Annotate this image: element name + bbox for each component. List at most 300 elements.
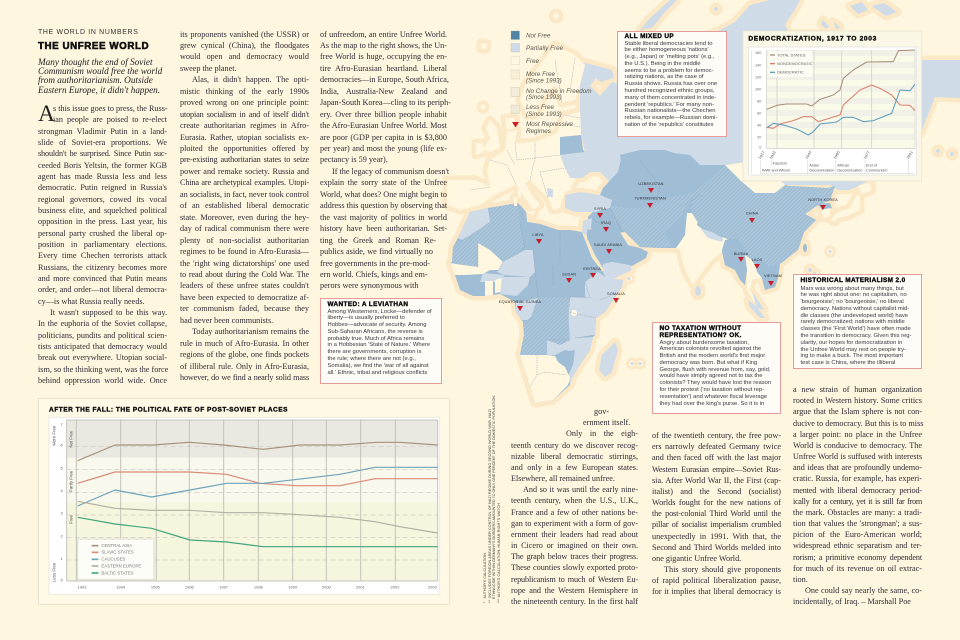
chart legend: EASTERN EUROPE xyxy=(101,563,141,568)
text column 3: pectancy is 59 year). xyxy=(320,155,388,164)
chart y axis: Free xyxy=(69,515,74,524)
chart y axis: 5 xyxy=(61,465,64,470)
chart title: AFTER THE FALL: THE POLITICAL FATE OF POST-SOVIET PLACES xyxy=(49,407,288,414)
text column 2: of an established liberal democratic xyxy=(180,201,309,210)
map legend: Regimes xyxy=(526,128,552,135)
text column 1 xyxy=(38,104,168,385)
sidebar text: for their protest ('no taxation without rep- xyxy=(660,387,764,393)
text column 6: mented with liberal democracy period- xyxy=(793,486,922,495)
vertical footnotes: * AUTHOR'S CALCULATION. xyxy=(483,552,487,603)
sidebar text: all.' Ethnic, tribal and religious conflicts xyxy=(328,370,427,376)
text column 1: agent has made Russia less and less xyxy=(38,172,167,181)
text column 1: position in parliamentary elections. xyxy=(38,240,167,249)
chart x axis: 2003 xyxy=(428,584,438,589)
chart y axis: 1 xyxy=(61,556,64,561)
text column 1: business elite, and squelched political xyxy=(38,206,167,215)
sidebar text xyxy=(660,340,771,407)
text column 3: history have been authoritarian. Set- xyxy=(320,224,447,233)
most repressive regime markers: EQUATORIAL GUINEA xyxy=(499,299,541,304)
chart x axis: Decolonization xyxy=(837,168,862,172)
chart legend: NONDEMOCRATIC xyxy=(777,61,813,66)
sidebar text xyxy=(800,286,912,366)
chart x axis: 1960 xyxy=(833,150,841,160)
chart legend xyxy=(769,51,813,77)
sidebar text: in a Hobbesian 'State of Nature.' Where xyxy=(328,342,430,348)
chart x axis: Decolonization xyxy=(809,168,834,172)
most repressive regime markers: ERITREA xyxy=(583,266,601,271)
sidebar text: Among Westerners, Locke—defender of xyxy=(328,308,432,314)
text column 3: India, Australia-New Zealand and xyxy=(320,87,447,96)
text column 2: create authoritarian regimes in Afro- xyxy=(180,121,309,130)
sidebar text: ing to make a buck. The most important xyxy=(800,353,903,359)
chart x axis xyxy=(758,150,914,172)
chart y axis: 6 xyxy=(61,443,64,448)
text column 4: republicanism to much of Western Eu- xyxy=(511,575,638,584)
most repressive regime markers: SAUDI ARABIA xyxy=(594,242,622,247)
text column 3: per year) and most the young (life ex- xyxy=(320,144,447,153)
sidebar text: probably true. Much of Africa remains xyxy=(328,336,424,342)
text column 5: This story should give proponents xyxy=(664,565,781,574)
chart x axis: 1997 xyxy=(219,584,229,589)
sidebar text: American colonists revolted against the xyxy=(660,346,761,352)
text column 2: sweep the planet. xyxy=(180,64,237,73)
sidebar text: Sub-Saharan Africans, the reverse is xyxy=(328,329,423,335)
text column 6: and ideas that are profoundly undemo- xyxy=(793,463,922,472)
text column 6: tion. xyxy=(793,575,808,584)
most repressive regime markers: VIETNAM xyxy=(764,273,782,278)
sidebar text: he was right about one: no capitalism, no xyxy=(800,292,907,298)
text column 3: perors were synonymous with xyxy=(320,281,418,290)
chart y axis: Not Free xyxy=(69,430,74,448)
chart x axis: Fascism xyxy=(773,162,787,166)
chart x axis: 2001 xyxy=(356,584,366,589)
chart y axis: 0 xyxy=(759,146,761,150)
text column 2: pre-existing authoritarian states to seize xyxy=(180,155,309,164)
standfirst xyxy=(38,56,162,95)
chart x axis: Asian xyxy=(809,163,819,167)
text column 3: Japan-South Korea—cling to its periph- xyxy=(320,98,451,107)
text column 5: pillar of socialist imperialism crumbled xyxy=(652,520,781,529)
chart lines xyxy=(78,442,438,547)
text column 1: It wasn't supposed to be this way. xyxy=(50,308,167,317)
text column 2: have been expected to democratize af- xyxy=(180,293,309,302)
sidebar: historical materialism xyxy=(793,274,922,369)
chart x axis: 1999 xyxy=(288,584,298,589)
map legend: Partially Free xyxy=(526,45,564,52)
text column 5 xyxy=(652,431,781,596)
text column 5: and then faced off with the last major xyxy=(652,453,781,462)
sidebar text: dle classes (the undeveloped world) have xyxy=(800,313,908,319)
text column 4: nizable liberal democratic stirrings, xyxy=(511,452,638,461)
text column 3: are poor (GDP per capita in is $3,800 xyxy=(320,133,447,142)
text column 6: a new strain of human organization xyxy=(793,385,922,394)
chart x axis xyxy=(78,584,438,589)
most repressive regime markers xyxy=(499,181,838,311)
chart title: DEMOCRATIZATION, 1917 TO 2003 xyxy=(748,36,877,43)
chart y axis: 4 xyxy=(61,488,64,493)
sidebar text: democracy was born. But what if King xyxy=(660,360,757,366)
chart legend xyxy=(78,539,154,580)
chart x axis: 1977 xyxy=(863,150,871,160)
text column 3: explain the sorry state of the Unfree xyxy=(320,178,447,187)
chart y axis: 100 xyxy=(755,87,761,91)
chart x axis: WWI and Wilson xyxy=(762,168,790,172)
vertical footnotes: ** INCLUDES FOREIGN AREAS UNDER CONTROL OF NAZI REGIME DURING SECOND WORLD WAR. NAZI xyxy=(488,409,492,603)
text column 5: one gigantic Unfree World. xyxy=(652,554,741,563)
most repressive regime markers: SOMALIA xyxy=(607,291,625,296)
section label: THE WORLD IN NUMBERS xyxy=(38,29,139,36)
chart x axis: 2001 xyxy=(906,150,914,160)
text column 3: As the map to the right shows, the Un- xyxy=(320,41,447,50)
sidebar text: there are governments, corruption is xyxy=(328,349,421,355)
text column 4: Elsewhere, all remained unfree. xyxy=(511,474,615,483)
country borders xyxy=(470,58,700,387)
chart y axis: 3 xyxy=(61,511,64,516)
text column 2: Today authoritarianism remains the xyxy=(192,327,309,336)
map legend: More Free xyxy=(526,71,556,78)
text column 4: ernment itself. xyxy=(583,418,630,427)
vertical footnotes: ETHNOCIDE WITHIN GERMANY'S BORDERS AMOUNTED TO ONLY ONE PERCENT OF THE DOMESTIC POPULATION. xyxy=(492,395,496,603)
text column 1: Every time Chechen terrorists attack xyxy=(38,251,167,260)
text column 5: the post-colonial Third World until the xyxy=(652,509,781,518)
sidebar heading: REPRESENTATION? OK. xyxy=(660,332,742,339)
chart x axis: 1996 xyxy=(185,584,195,589)
text column 1: ism, so the thinking went, was the force xyxy=(38,365,168,374)
text column 1: strongman Vladimir Putin in a land- xyxy=(38,127,167,136)
sidebar text: ularity, our hopes for democratization in xyxy=(800,340,902,346)
standfirst: Eastern Europe, it didn't happen. xyxy=(38,85,160,95)
sidebar text: Marx was wrong about many things, but xyxy=(800,286,904,292)
text column 2: an socialists, in fact, never took control xyxy=(180,190,309,199)
text column 2: China are archetypical examples. Utopi- xyxy=(180,178,309,187)
sidebar text: pendent 'republics.' For many non- xyxy=(624,102,714,108)
text column 2: however, do we find a nearly solid mass xyxy=(180,373,309,382)
sidebar text: test case is China, where the illiberal xyxy=(800,360,895,366)
chart x axis: 1998 xyxy=(254,584,264,589)
text column 4: ernment their leaders had read about xyxy=(511,530,638,539)
countries xyxy=(447,0,960,403)
text column 1: order, and order—not liberal democra- xyxy=(38,285,167,294)
coastal halo xyxy=(447,0,960,403)
map legend xyxy=(511,31,591,135)
chart x axis: African xyxy=(837,163,849,167)
text column 1: democratic. Putin reigned in Russia's xyxy=(38,183,167,192)
sidebar text xyxy=(624,40,718,128)
sidebar text: British and the modern world's first major xyxy=(660,353,765,359)
sidebar heading: NO TAXATION WITHOUT xyxy=(660,325,741,332)
text column 2: ter communism faded, because they xyxy=(180,304,309,313)
chart y axis xyxy=(755,51,761,150)
text column 1: shouldn't be surprised. Since Putin suc- xyxy=(38,149,167,158)
standfirst: Communism would free the world xyxy=(38,66,162,76)
vertical footnotes: *** AUTHOR'S CALCULATION; HUMAN RIGHTS WATCH xyxy=(497,503,501,603)
sidebar heading: HISTORICAL MATERIALISM 2.0 xyxy=(800,277,906,284)
chart x axis: 1995 xyxy=(151,584,161,589)
map legend: No Change in Freedom xyxy=(526,88,591,95)
text column 3: publics aside, we find virtually no xyxy=(320,247,433,256)
map legend: Less Free xyxy=(526,104,554,111)
chart legend: SLAVIC STATES xyxy=(101,550,134,555)
map legend: Most Repressive xyxy=(526,121,573,128)
text column 2: its proponents vanished (the USSR) or xyxy=(180,30,309,38)
sidebar text: Stable liberal democracies tend to xyxy=(624,40,713,46)
most repressive regime markers: BURMA xyxy=(734,251,749,256)
chart y axis: 2 xyxy=(61,533,64,538)
map legend: (Since 1993) xyxy=(526,111,562,118)
text column 2: proved wrong on one principle point: xyxy=(180,98,309,107)
text column 2: had never been communists. xyxy=(180,316,273,325)
text column 1: personal party crushed the liberal op- xyxy=(38,229,167,238)
most repressive regime markers: LIBYA xyxy=(532,232,544,237)
text column 6: rorism; a primitive economy dependent xyxy=(793,553,922,562)
text column 6: picion of the Euro-American world; xyxy=(793,530,922,539)
chart x axis: 1944 xyxy=(805,150,813,160)
text column 4: France and a few of other nations be- xyxy=(511,508,638,517)
sidebar heading: WANTED: A LEVIATHAN xyxy=(328,301,408,308)
text column 2: would open and democracy would xyxy=(180,52,309,61)
text column 1: tists anticipated that democracy would xyxy=(38,342,167,351)
standfirst: Many thought the end of Soviet xyxy=(38,56,153,66)
text column 1: ian people are poised to re-elect xyxy=(53,115,167,124)
sidebar text: Hobbes—advocate of security. Among xyxy=(328,322,426,328)
text column 2: rule in much of Afro-Eurasia. In other xyxy=(180,339,309,348)
text column 6 xyxy=(793,385,924,606)
text column 1: and more convinced that Putin means xyxy=(38,274,167,283)
map legend: Free xyxy=(526,58,539,65)
text column 2: leaders of these unfree states couldn't xyxy=(180,281,309,290)
text column 5: Second and Third Worlds melded into xyxy=(652,543,781,552)
sidebar text: the Unfree World may rest on people try- xyxy=(800,347,906,353)
chart y axis: 80 xyxy=(757,99,761,103)
sidebar text: many of them concentrated in inde- xyxy=(624,95,716,101)
text column 4: gan to experiment with a form of gov- xyxy=(511,519,638,528)
chart x axis: 1917 xyxy=(758,150,766,160)
sidebar text: the U.S.). Being in the middle xyxy=(624,61,701,67)
text column 3 xyxy=(320,30,451,290)
sidebar text: rarely democratized; nations with middle xyxy=(800,319,905,325)
text column 6: widespread ethnic separatism and ter- xyxy=(793,541,922,550)
text column 6: a larger point: no place in the Unfree xyxy=(793,430,922,439)
chart legend: DEMOCRATIC xyxy=(777,70,804,75)
text column 4: in Cicero or imagined on their own. xyxy=(511,541,638,550)
text column 5: Western Eurasian empire—Soviet Rus- xyxy=(652,465,781,474)
text column 6: tion that values the 'strongman'; a sus- xyxy=(793,519,922,528)
sidebar text: the rule; where there are not (e.g., xyxy=(328,356,416,362)
sidebar text: George, flush with revenue from, say, gold, xyxy=(660,367,770,373)
chart y axis: 7 xyxy=(61,422,64,427)
sidebar text: seems to be a problem for democ- xyxy=(624,68,714,74)
text column 2: day of radical communism there were xyxy=(180,224,309,233)
sidebar: wanted a leviathan xyxy=(320,298,442,384)
text column 2: utopian socialism in and of itself didn't xyxy=(180,110,309,119)
sidebar text: colonists? They would have lost the reason xyxy=(660,380,771,386)
text column 1: ceeded Boris Yeltsin, the former KGB xyxy=(38,161,167,170)
sidebar text: the transition to democracy. Given this reg- xyxy=(800,333,911,339)
text column 6: ducive to democracy. But this is to miss xyxy=(793,419,923,428)
text column 5: of rapid political liberalization pause, xyxy=(652,576,781,585)
most repressive regime markers: UZBEKISTAN xyxy=(638,181,664,186)
text column 5: Worlds fought for the new nations of xyxy=(652,498,781,507)
text column 6: World is conducive to democracy. The xyxy=(793,441,922,450)
sidebar text: liberty—is usually preferred to xyxy=(328,315,405,321)
text column 2: ploited the opportunities offered by xyxy=(180,144,309,153)
map legend: (Since 1993) xyxy=(526,94,562,101)
text column 5: for it implies that liberal democracy is xyxy=(652,587,781,596)
most repressive regime markers: SYRIA xyxy=(594,206,606,211)
text column 2: plenty of non-socialist authoritarian xyxy=(180,236,309,245)
sidebar heading xyxy=(660,325,742,339)
text column 3: ery. Over three billion people inhabit xyxy=(320,110,447,119)
chart x axis: 2002 xyxy=(391,584,400,589)
chart y axis: 120 xyxy=(755,75,761,79)
text column 1: opposition in the press. Last year, his xyxy=(38,217,167,226)
chart y axis: Less Free xyxy=(52,562,57,582)
most repressive regime markers: SUDAN xyxy=(562,272,576,276)
text column 2: regions of the globe, one finds pockets xyxy=(180,350,309,359)
text column 5: sia. After World War II, the First (cap- xyxy=(652,476,781,485)
chart frame and bands xyxy=(749,47,917,175)
drop cap: A xyxy=(38,101,55,127)
chart x axis: 1993 xyxy=(78,584,87,589)
standfirst: from authoritarianism. Outside xyxy=(38,75,153,85)
text column 6: One could say nearly the same, co- xyxy=(805,586,922,595)
text column 1: politicians, pundits and political scien- xyxy=(38,331,167,340)
text column 6: cratic. Russia, for example, has experi- xyxy=(793,474,922,483)
text column 1: regional governors, cowed its vocal xyxy=(38,195,167,204)
text column 3: democracies—in Europe, South Africa, xyxy=(320,75,449,84)
sidebar text: be either homogeneous 'nations' xyxy=(624,47,709,53)
text column 3: free governments in the pre-mod- xyxy=(320,259,430,268)
sidebar text: 'bourgeoisie'; no 'bourgeoisie,' no liberal xyxy=(800,299,904,305)
chart y axis: 0 xyxy=(61,577,64,582)
text column 3: ting the Greek and Roman Re- xyxy=(320,236,436,245)
sidebar text: Somalia), we find the 'war of all against xyxy=(328,363,429,369)
chart y axis xyxy=(52,422,74,582)
text column 2: state. Moreover, even during the hey- xyxy=(180,213,309,222)
text column 2 xyxy=(180,30,310,382)
sidebar text: (e.g., Japan) or 'melting pots' (e.g., xyxy=(624,54,714,60)
text column 6: the mark. Obstacles are many: a tradi- xyxy=(793,508,922,517)
text column 4: rope and the Western Hemisphere in xyxy=(511,586,638,595)
text column 2: Eurasia. Rather, utopian socialists ex- xyxy=(180,133,309,142)
text column 5: unexpectedly in 1991. With that, the xyxy=(652,532,781,541)
text column 4: and only in a few European states. xyxy=(511,463,638,472)
text column 2: regimes to be found in Afro-Eurasia— xyxy=(180,247,309,256)
chart bands and grid xyxy=(49,417,440,594)
sidebar text: classes (the 'First World') have often made xyxy=(800,326,911,332)
most repressive regime markers: CHINA xyxy=(746,210,759,216)
text column 6: rooted in Western history. Some critics xyxy=(793,396,922,405)
chart y axis: 40 xyxy=(757,123,761,127)
most repressive regime markers: LAOS xyxy=(752,257,763,262)
text column 4: gov- xyxy=(594,407,609,416)
text column 2: of illiberal rule. Only in Afro-Eurasia, xyxy=(180,362,309,371)
text column 2: Alas, it didn't happen. The opti- xyxy=(192,75,309,84)
chart y axis: 60 xyxy=(757,111,761,115)
text column 3: of unfreedom, an entire Unfree World. xyxy=(320,30,447,38)
text column 2: the 'right wing dictatorships' one used xyxy=(180,259,309,268)
chart x axis: 2000 xyxy=(322,584,332,589)
text column 1: cy—is what Russia really needs. xyxy=(38,297,145,306)
text column 2: power and remake society. Russia and xyxy=(180,167,309,176)
text column 6: Unfree World is suffused with interests xyxy=(793,452,922,461)
text column 3: free World is huge, occupying the en- xyxy=(320,52,447,61)
chart legend: TOTAL STATES xyxy=(777,52,806,57)
chart y axis: Partly Free xyxy=(69,470,74,492)
sidebar text: rebels, for example—Russian domi- xyxy=(624,115,717,121)
text column 5: italist) and the Second (socialist) xyxy=(652,487,781,496)
text column 1: In the euphoria of the Soviet collapse, xyxy=(38,319,167,328)
chart panel: democratization 1917 to 2003 xyxy=(742,30,922,182)
text column 3: address this question by observing that xyxy=(320,201,447,210)
text column 5: of the twentieth century, the free pow- xyxy=(652,431,781,440)
sidebar text: ratizing nations, as the case of xyxy=(624,74,703,80)
text column 3: World, what does? One might begin to xyxy=(320,190,447,199)
map legend: Not Free xyxy=(526,32,551,40)
text column 1: Russians, the citizenry becomes more xyxy=(38,263,167,272)
chart x axis: 1922 xyxy=(769,150,777,160)
text column 6: ically for a century, yet it is still far from xyxy=(793,497,922,506)
text column 4: And so it was until the early nine- xyxy=(523,485,638,494)
text column 5: ers narrowly defeated Germany twice xyxy=(652,442,781,451)
text column 3: the Afro-Eurasian Unfree World. Most xyxy=(320,121,447,130)
text column 2: to read about during the Cold War. The xyxy=(180,270,309,279)
text column 2: mistic thinking of the early 1990s xyxy=(180,87,309,96)
text column 4: the nineteenth century. In the first half xyxy=(511,597,638,606)
text column 1: break out everywhere. Utopian social- xyxy=(38,353,167,362)
chart y axis: 160 xyxy=(755,51,761,55)
sidebar heading: ALL MIXED UP xyxy=(624,32,674,40)
sidebar: all mixed up xyxy=(617,31,727,137)
sidebar text: resentation') and whatever fiscal leverage xyxy=(660,394,767,400)
text column 4: These counties slowly exported proto- xyxy=(511,563,638,572)
chart x axis: 1994 xyxy=(116,584,126,589)
text column 3: tire Afro-Eurasian heartland. Liberal xyxy=(320,64,447,73)
text column 4: Only in the eigh- xyxy=(566,429,638,438)
title: THE UNFREE WORLD xyxy=(38,41,149,52)
chart y axis: 20 xyxy=(757,135,761,139)
sidebar text: they had over the king's purse. So it is in xyxy=(660,401,764,407)
text column 4: teenth century, when the U.S., U.K., xyxy=(511,496,638,505)
text column 1: behind oppression world wide. Once xyxy=(38,376,167,385)
chart lines xyxy=(767,50,915,135)
chart y axis: More Free xyxy=(52,425,57,446)
sidebar text: Angry about burdensome taxation, xyxy=(660,340,749,346)
sidebar text: nation of the 'republics' constitutes xyxy=(624,122,713,128)
chart y axis: 140 xyxy=(755,63,761,67)
chart legend: CAUCUSES xyxy=(101,557,125,562)
sidebar text: Russian nationalists—the Chechen xyxy=(624,108,715,114)
text column 1: slide of Soviet-era proportions. We xyxy=(38,138,167,147)
text column 3: If the legacy of communism doesn't xyxy=(332,167,449,176)
text column 6: incidentally, of Iraq. – Marshall Poe xyxy=(793,597,911,606)
text column 4 xyxy=(511,407,638,606)
text column 4: The graph below traces their progress. xyxy=(511,552,638,561)
most repressive regime markers: TURKMENISTAN xyxy=(634,196,666,200)
map legend: (Since 1993) xyxy=(526,78,562,84)
chart x axis: End of xyxy=(866,163,878,167)
chart legend: BALTIC STATES xyxy=(101,570,134,575)
chart panel: after the fall xyxy=(38,398,450,605)
sidebar text: Russia shows. Russia has over one xyxy=(624,81,717,87)
text column 6: for much of its revenue on oil extrac- xyxy=(793,564,922,573)
sidebar text: hundred recognized ethnic groups, xyxy=(624,88,714,94)
text column 3: ern world. Chiefs, kings and em- xyxy=(320,270,428,279)
sidebar: no taxation without representation xyxy=(652,322,781,414)
chart x axis: Communism xyxy=(866,168,887,172)
most repressive regime markers: NORTH KOREA xyxy=(808,197,838,202)
text column 6: argue that the Islam sphere is not con- xyxy=(793,407,922,416)
